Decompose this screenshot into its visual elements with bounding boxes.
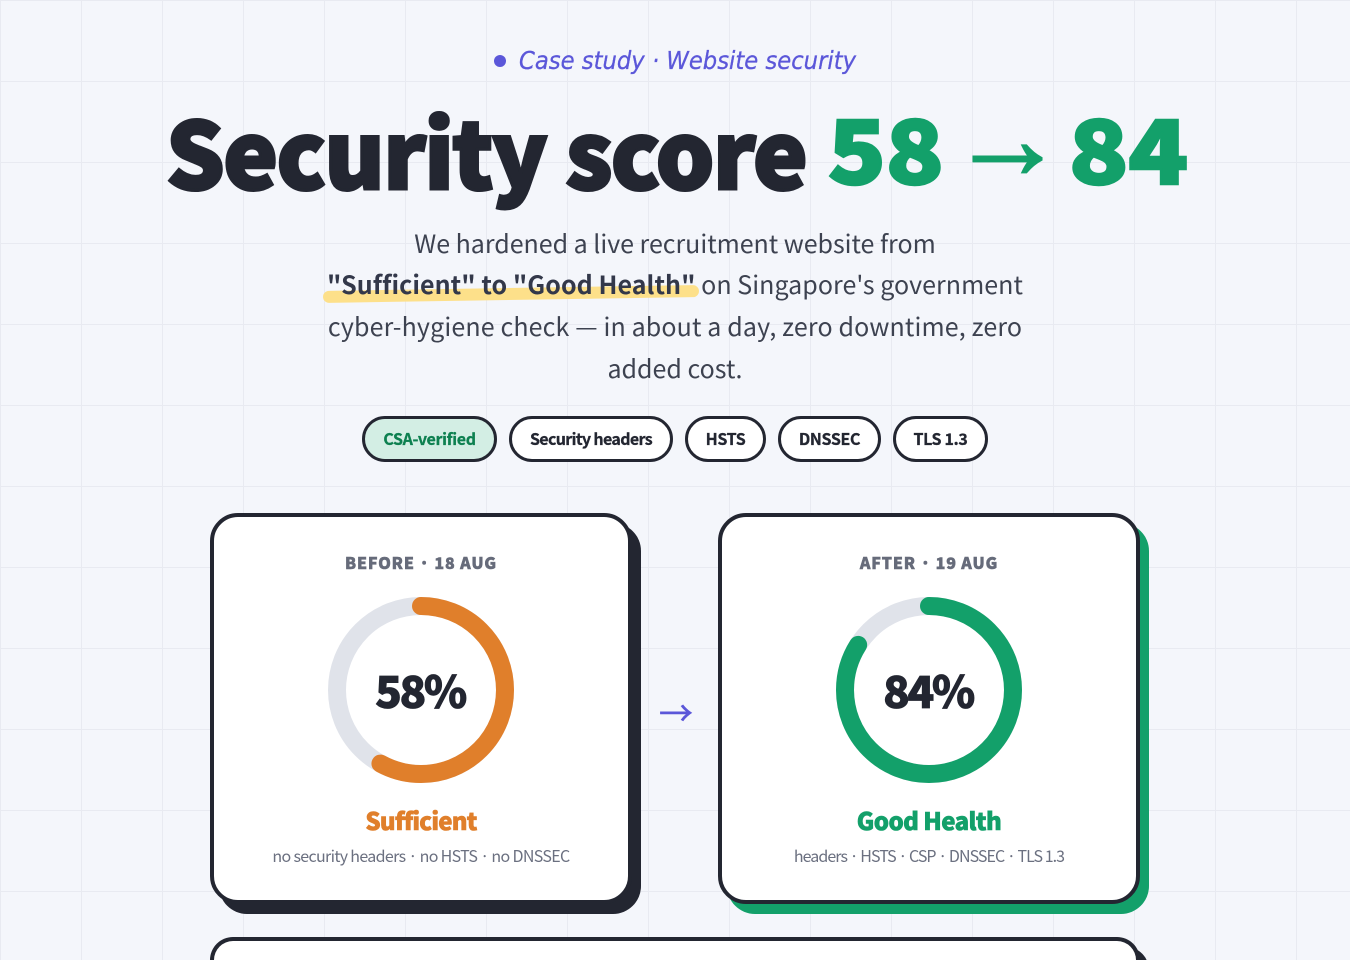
chip: DNSSEC: DNSSEC [799, 426, 860, 450]
donut chart: 58% [328, 597, 514, 783]
title score after: 84 [1069, 83, 1188, 210]
eyebrow dot [494, 55, 506, 67]
score: 58%: 58% [375, 657, 465, 721]
donut chart: 84% [836, 597, 1022, 783]
score: 84%: 84% [883, 657, 973, 721]
tag chips [362, 416, 988, 462]
intro paragraph: We hardened a live recruitment website from [414, 225, 936, 261]
panel: next section, cut off at the page edge [210, 937, 1140, 960]
eyebrow: case study label [494, 46, 856, 75]
intro paragraph: added cost. [607, 350, 743, 386]
highlight stroke [323, 285, 699, 303]
note: before details: no security headers · no HSTS · no DNSSEC [272, 843, 570, 867]
arrow between cards: → [659, 687, 693, 736]
chip: TLS 1.3 [893, 416, 988, 462]
chip: CSA-verified [362, 416, 497, 462]
chip: DNSSEC [778, 416, 881, 462]
status: Sufficient: Sufficient [365, 802, 477, 837]
label: after date: AFTER · 19 AUG [860, 550, 998, 574]
status: Good Health: Good Health [857, 802, 1001, 837]
label: before date: BEFORE · 18 AUG [345, 550, 497, 574]
chip: HSTS: HSTS [706, 426, 745, 450]
intro paragraph: "Sufficient" to "Good Health" on Singapore's government [327, 266, 1023, 302]
chip: Security headers [509, 416, 673, 462]
chip: CSA-verified: CSA-verified [383, 426, 476, 450]
title score before: 58 [828, 83, 944, 210]
chip: HSTS [685, 416, 766, 462]
panel: after score [718, 513, 1140, 904]
panel: before score [210, 513, 632, 904]
eyebrow text: Case study · Website security [519, 46, 856, 75]
intro paragraph: cyber-hygiene check — in about a day, zero downtime, zero [328, 308, 1022, 344]
note: after details: headers · HSTS · CSP · DNSSEC · TLS 1.3 [794, 843, 1064, 867]
title [166, 75, 1188, 216]
chip: Security headers: Security headers [530, 426, 652, 450]
title arrow: → [950, 75, 1064, 203]
title text: Security score [166, 83, 806, 216]
intro paragraph [323, 225, 1023, 386]
chip: TLS 1.3: TLS 1.3 [913, 426, 968, 450]
